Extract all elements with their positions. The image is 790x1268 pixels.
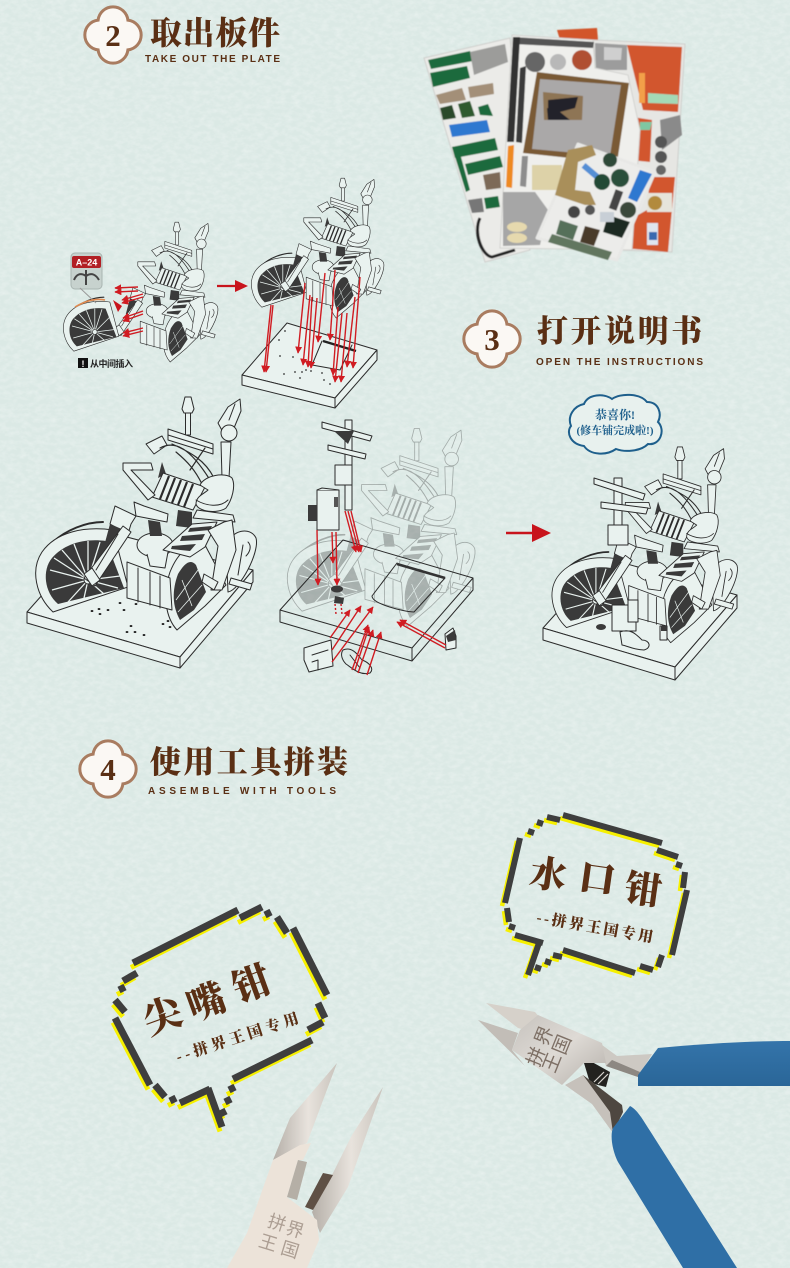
step 4 heading: [80, 741, 348, 797]
bubble caption: --拼界王国专用: [535, 908, 655, 946]
drawing: finished workshop: [543, 447, 737, 680]
title: 取出板件: 取出板件: [150, 15, 280, 51]
speech cloud: 恭喜你: [569, 395, 662, 454]
subtitle: take out the plate: TAKE OUT THE PLATE: [145, 54, 280, 65]
note: 从中间插入: 从中间插入: [90, 358, 133, 369]
plate right: [593, 40, 685, 252]
blade and steel head: [478, 1003, 652, 1133]
plate middle: [500, 35, 640, 250]
speech cloud: 恭喜你: 恭喜你!: [595, 407, 635, 422]
instruction: wheel insertion: [63, 222, 218, 369]
blade and steel head: 国: [550, 1032, 576, 1058]
small parts: [304, 586, 456, 674]
parts on finished model: [596, 600, 667, 650]
title: 使用工具拼装: 使用工具拼装: [150, 745, 348, 780]
base outline: [280, 540, 473, 661]
badge: number 2: [85, 7, 141, 63]
note: 从中间插入: !: [82, 359, 84, 369]
blade and steel head: 拼: [523, 1044, 550, 1070]
tool: needle nose pliers: [227, 1063, 383, 1268]
bubble title: 水口钳: 口: [576, 857, 618, 903]
arrow: assembly to finished: [506, 524, 551, 542]
bubble title: 水口钳: 钳: [622, 867, 664, 914]
pole part: [322, 420, 372, 510]
plate front: [537, 144, 655, 260]
drop arrows: [264, 270, 360, 382]
tool: needle nose pliers: 拼: [265, 1211, 289, 1235]
pixel bubble: right: [502, 815, 687, 978]
ghost cart: [287, 428, 475, 626]
subtitle: assemble with tools: ASSEMBLE WITH TOOLS: [148, 786, 336, 797]
lower blue handle: [612, 1106, 737, 1268]
tool: needle nose pliers: 国: [278, 1238, 302, 1262]
speech cloud: 恭喜你: (修车铺完成啦!): [576, 423, 654, 437]
badge: number 3: 3: [484, 322, 500, 357]
plate left: [424, 38, 530, 262]
drawing: exploded assembly: [280, 420, 475, 675]
part label A-24: [71, 253, 105, 307]
bubble title: 尖嘴钳: 尖: [138, 989, 192, 1043]
badge: number 2: 2: [105, 18, 121, 53]
bubble title: 尖嘴钳: 钳: [227, 959, 277, 1011]
base plate: [242, 323, 377, 408]
insertion arrows: [113, 287, 143, 336]
pixel bubble: left: [113, 907, 327, 1132]
title: 打开说明书: 打开说明书: [537, 314, 704, 349]
step 3 heading: [464, 311, 704, 368]
bubble title: 尖嘴钳: 嘴: [182, 977, 232, 1029]
tool: needle nose pliers: 王: [256, 1231, 280, 1255]
cart drawing: [251, 178, 384, 318]
arrow: step one to two: [217, 280, 248, 292]
blade and steel head: 界: [532, 1023, 558, 1049]
drawing: large cart on base: [27, 397, 257, 668]
bubble title: 水口钳: 水: [527, 852, 569, 899]
box part: [308, 488, 339, 530]
tool: needle nose pliers: 界: [283, 1218, 307, 1242]
upper blue handle: [638, 1041, 790, 1086]
wheel drawing: [63, 222, 218, 362]
tool: side cutters: [478, 1003, 790, 1268]
assembly arrows: [317, 511, 446, 675]
bubble title: 水口钳: [527, 852, 664, 914]
pole on finished model: [594, 478, 648, 545]
step 2 heading: [85, 7, 280, 65]
part label A-24: A–24: [76, 258, 97, 268]
instruction: mount on base: [242, 178, 384, 408]
blade and steel head: 王: [540, 1050, 566, 1076]
bubble title: 尖嘴钳: [138, 959, 277, 1043]
badge: number 3: [464, 311, 520, 367]
badge: number 4: [80, 741, 136, 797]
bubble caption: --拼界王国专用: [174, 1009, 301, 1066]
badge: number 4: 4: [100, 752, 116, 787]
subtitle: open the instructions: OPEN THE INSTRUCTIONS: [536, 357, 703, 368]
photo: model plates: [424, 28, 685, 262]
